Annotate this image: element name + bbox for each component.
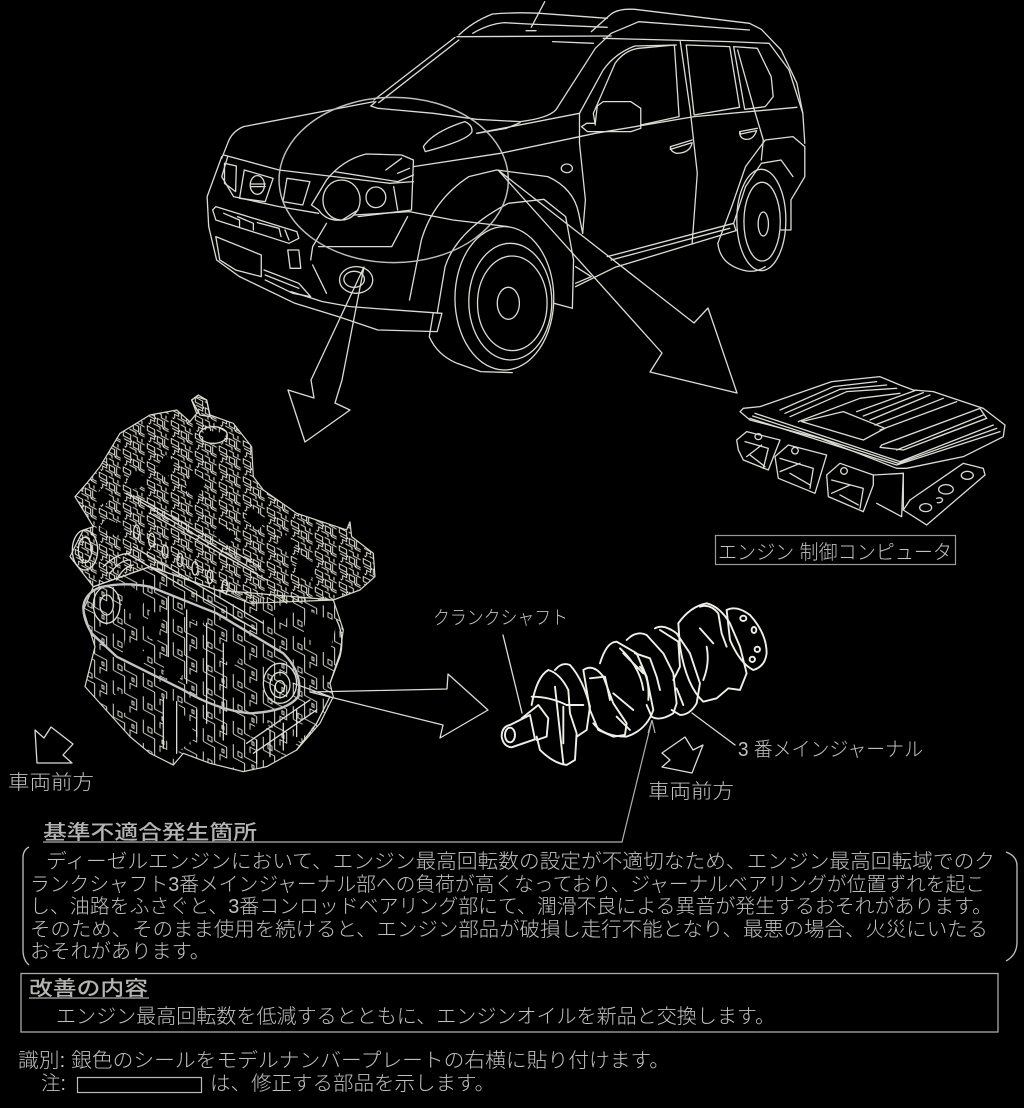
panel: defect description: ディーゼルエンジンにおいて、エンジン最高回転数の設定が不適切なため、エンジン最高回転域でのク: [46, 850, 995, 873]
car doors and windows: [413, 38, 803, 287]
label: crankshaft: クランクシャフト: [433, 608, 568, 629]
panel: improvement details: [21, 974, 998, 1032]
car illustration: [207, 2, 805, 373]
panel: improvement details: 改善の内容: [29, 977, 148, 1000]
icon: vehicle front arrow, crankshaft: [662, 737, 703, 773]
leader: crankshaft: [503, 635, 522, 713]
leader: number 3 main journal: [692, 713, 735, 745]
front bumper and fog lamp: [207, 157, 508, 332]
heading: non-conforming location: 基準不適合発生箇所: [43, 821, 257, 844]
panel: defect description: おそれがあります。: [30, 940, 210, 963]
text: legend note: [41, 1072, 495, 1095]
windshield and hood: [222, 33, 611, 183]
text: legend note: 注:: [41, 1072, 66, 1095]
crankshaft illustration: [502, 603, 767, 765]
arrow: car to engine: [288, 267, 364, 442]
icon: vehicle front arrow, engine: [35, 727, 73, 763]
arrow: car to engine control computer: [498, 170, 737, 393]
label: vehicle front, engine: 車両前方: [8, 771, 94, 794]
label: vehicle front, crankshaft: 車両前方: [648, 780, 734, 803]
panel: improvement details: エンジン最高回転数を低減するとともに、エンジンオイルを新品と交換します。: [56, 1005, 775, 1028]
headlight: [311, 154, 413, 220]
grille and badge: [222, 157, 319, 213]
inspection circle on car: [279, 97, 508, 263]
panel: defect description: そのため、そのまま使用を続けると、エンジン部品が破損し走行不能となり、最悪の場合、火災にいたる: [30, 918, 988, 941]
engine body texture: [70, 397, 375, 603]
engine lower block texture: [83, 567, 343, 772]
engine illustration: [70, 395, 375, 772]
engine control computer unit: [737, 377, 1005, 525]
text: legend note: は、修正する部品を示します。: [210, 1072, 495, 1095]
car roof and rails: [457, 2, 805, 143]
engine dark gaps: [95, 430, 337, 753]
engine belt loop: [83, 584, 299, 713]
front wheel: [410, 170, 583, 373]
panel: defect description: ランクシャフト3番メインジャーナル部への負荷が高くなっており、ジャーナルベアリングが位置ずれを起こ: [30, 873, 985, 896]
engine outline and structural lines: [72, 395, 342, 763]
panel: defect description: [23, 847, 1017, 965]
text: identification note: 識別: 銀色のシールをモデルナンバープレートの右横に貼り付けます。: [18, 1049, 670, 1072]
label: engine control computer: エンジン 制御コンピュータ: [718, 541, 952, 564]
leader: defect location to journal: [43, 720, 655, 842]
rear wheel: [718, 137, 805, 271]
panel: defect description: し、油路をふさぐと、3番コンロッドベアリング部にて、潤滑不良による異音が発生するおそれがあります。: [30, 895, 992, 918]
label: number 3 main journal: 3 番メインジャーナル: [738, 738, 923, 761]
arrow: engine to crankshaft: [310, 674, 488, 738]
